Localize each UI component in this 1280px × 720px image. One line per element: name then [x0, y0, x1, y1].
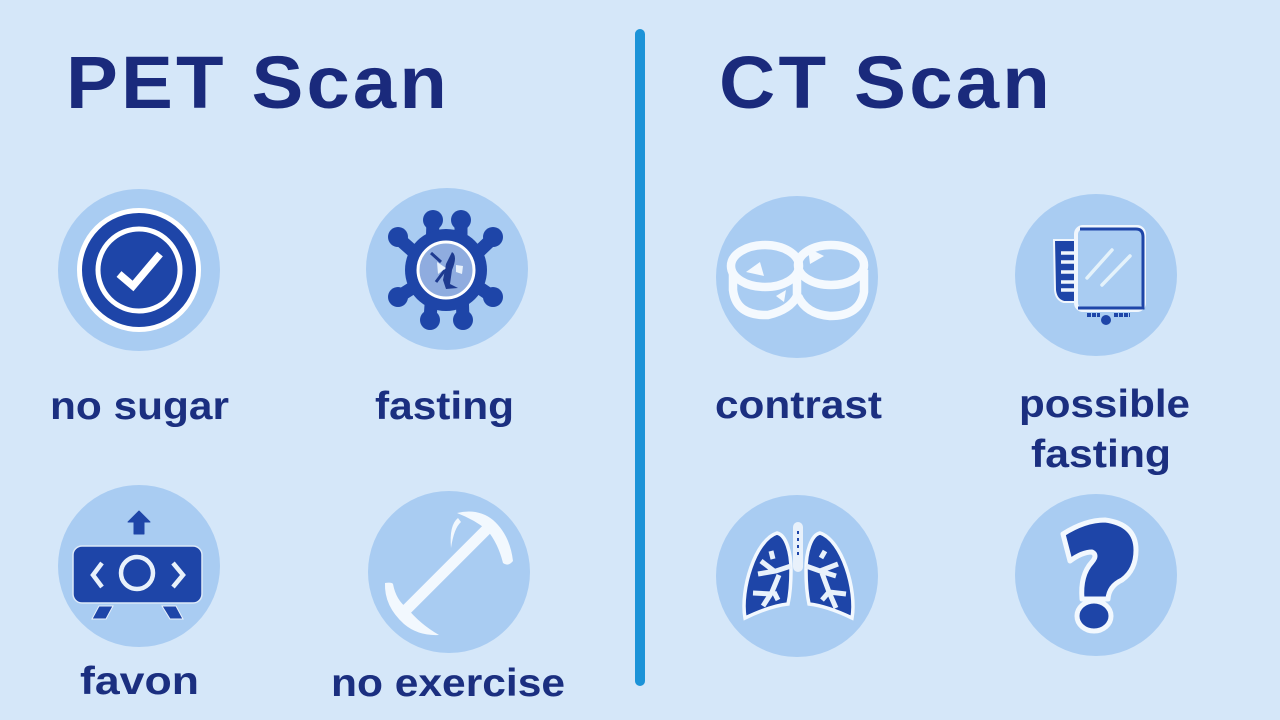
- icon: possible fasting scanner: [1015, 194, 1177, 356]
- heading: CT Scan: CT Scan: [719, 41, 1053, 124]
- center divider: [635, 29, 645, 686]
- label: possible fasting: [1019, 383, 1190, 476]
- heading: PET Scan: PET Scan: [66, 41, 450, 124]
- label: no sugar: no sugar: [50, 385, 229, 428]
- label: favon: favon: [80, 660, 199, 703]
- icon: lungs: [716, 495, 878, 657]
- label: possible fasting: fasting: [1031, 433, 1171, 476]
- label: fasting: fasting: [375, 385, 514, 428]
- panel: PET Scan: [50, 41, 565, 705]
- label: possible fasting: possible: [1019, 383, 1190, 426]
- label: contrast: contrast: [715, 384, 882, 427]
- icon: favon device with arrow: [58, 485, 220, 647]
- panel: CT Scan: [715, 41, 1190, 657]
- icon: no exercise pick shape: [368, 491, 530, 653]
- icon: no sugar check badge: [58, 189, 220, 351]
- label: no exercise: no exercise: [331, 662, 565, 705]
- icon: question mark: [1015, 494, 1177, 656]
- icon: fasting gear: [366, 188, 528, 350]
- icon: contrast rings: [716, 196, 878, 358]
